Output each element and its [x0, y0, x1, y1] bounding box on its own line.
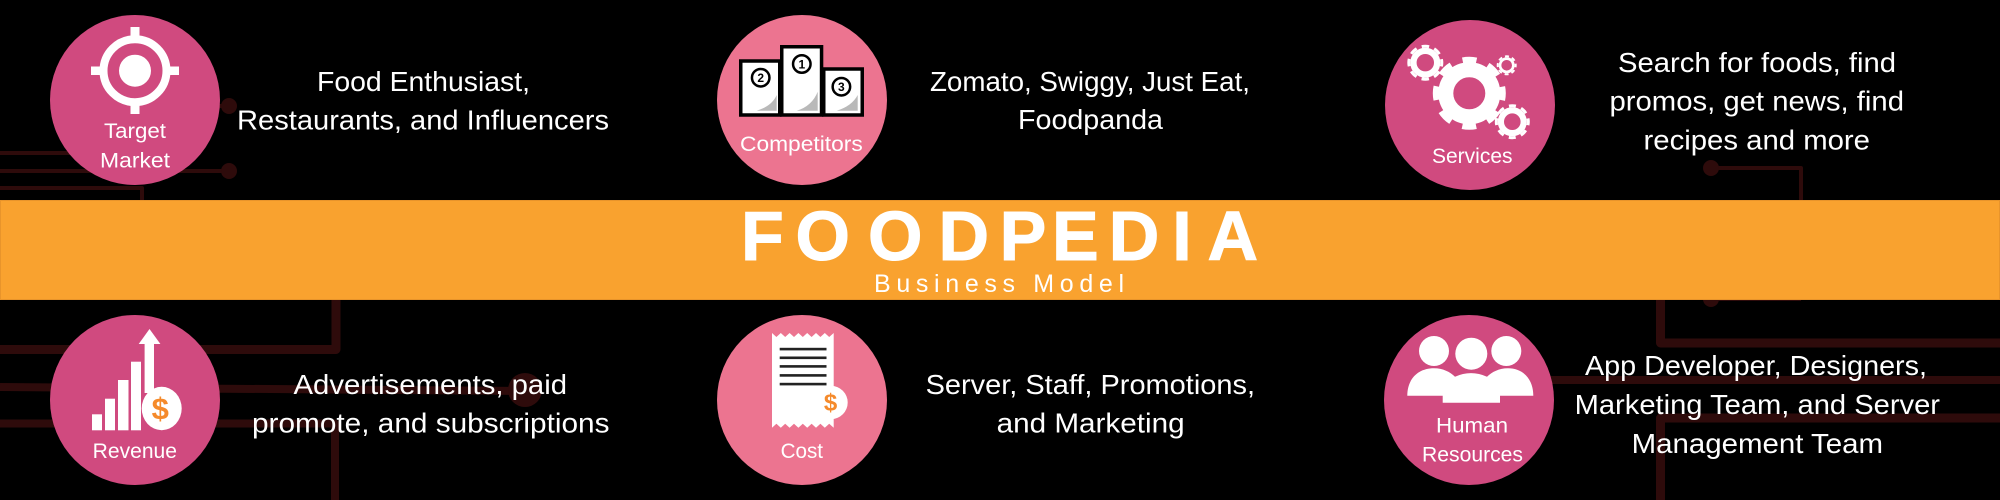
- text: target market description: Restaurants, and Influencers: [237, 104, 609, 136]
- icon: podium: 2: [757, 71, 764, 85]
- text: human resources description: [1575, 350, 1940, 459]
- panel: competitors: [717, 15, 1250, 185]
- label: Human Resources: Human: [1436, 415, 1508, 438]
- icon: receipt: [772, 333, 848, 428]
- icon: gears: [1409, 46, 1528, 138]
- text: revenue description: [252, 369, 610, 439]
- text: revenue description: Advertisements, paid: [294, 369, 567, 400]
- text: services description: promos, get news, find: [1610, 86, 1904, 117]
- panel: cost: [717, 315, 1255, 485]
- label: Competitors: Competitors: [740, 133, 863, 156]
- icon: podium: 1: [798, 57, 805, 71]
- title band: [0, 197, 2000, 300]
- icon: podium: [741, 47, 862, 115]
- panel: target market: [50, 15, 609, 185]
- icon: target: [91, 27, 179, 114]
- label: Services: Services: [1432, 145, 1512, 168]
- text: competitors description: Foodpanda: [1018, 104, 1163, 135]
- title: FOODPEDIA: FOODPEDIA: [741, 197, 1258, 275]
- icon: podium: 3: [838, 80, 845, 94]
- label: Target Market: Market: [100, 150, 170, 173]
- circle: human resources: [1384, 315, 1554, 485]
- icon: receipt: $: [824, 390, 838, 416]
- text: revenue description: promote, and subscriptions: [252, 408, 610, 439]
- text: target market description: Food Enthusiast,: [317, 66, 530, 97]
- label: Human Resources: [1422, 415, 1523, 467]
- label: Revenue: Revenue: [93, 440, 177, 463]
- text: services description: Search for foods, find: [1618, 47, 1896, 78]
- text: competitors description: Zomato, Swiggy, Just Eat,: [930, 66, 1250, 97]
- label: Target Market: Target: [104, 120, 166, 143]
- circle: services: [1385, 20, 1555, 190]
- circle: revenue: [50, 315, 220, 485]
- text: cost description: [926, 369, 1255, 439]
- text: target market description: [237, 66, 609, 136]
- text: cost description: Server, Staff, Promotions,: [926, 369, 1255, 400]
- text: services description: [1610, 47, 1904, 156]
- icon: people: [1407, 336, 1533, 403]
- circle: cost: [717, 315, 887, 485]
- label: Target Market: [100, 120, 170, 173]
- panel: revenue: [50, 315, 610, 485]
- text: human resources description: App Developer, Designers,: [1585, 350, 1927, 381]
- panel: services: [1385, 20, 1904, 190]
- label: Human Resources: Resources: [1422, 444, 1523, 467]
- subtitle: Business Model: Business Model: [874, 270, 1124, 298]
- text: services description: recipes and more: [1644, 125, 1870, 156]
- icon: revenue chart: [92, 329, 182, 430]
- circle: target market: [50, 15, 220, 185]
- text: competitors description: [930, 66, 1250, 135]
- text: cost description: and Marketing: [997, 408, 1185, 439]
- circle: competitors: [717, 15, 887, 185]
- label: Cost: Cost: [781, 440, 823, 463]
- icon: revenue chart: $: [152, 391, 169, 426]
- panel: human resources: [1384, 315, 1940, 485]
- text: human resources description: Management Team: [1632, 428, 1883, 459]
- text: human resources description: Marketing Team, and Server: [1575, 389, 1940, 420]
